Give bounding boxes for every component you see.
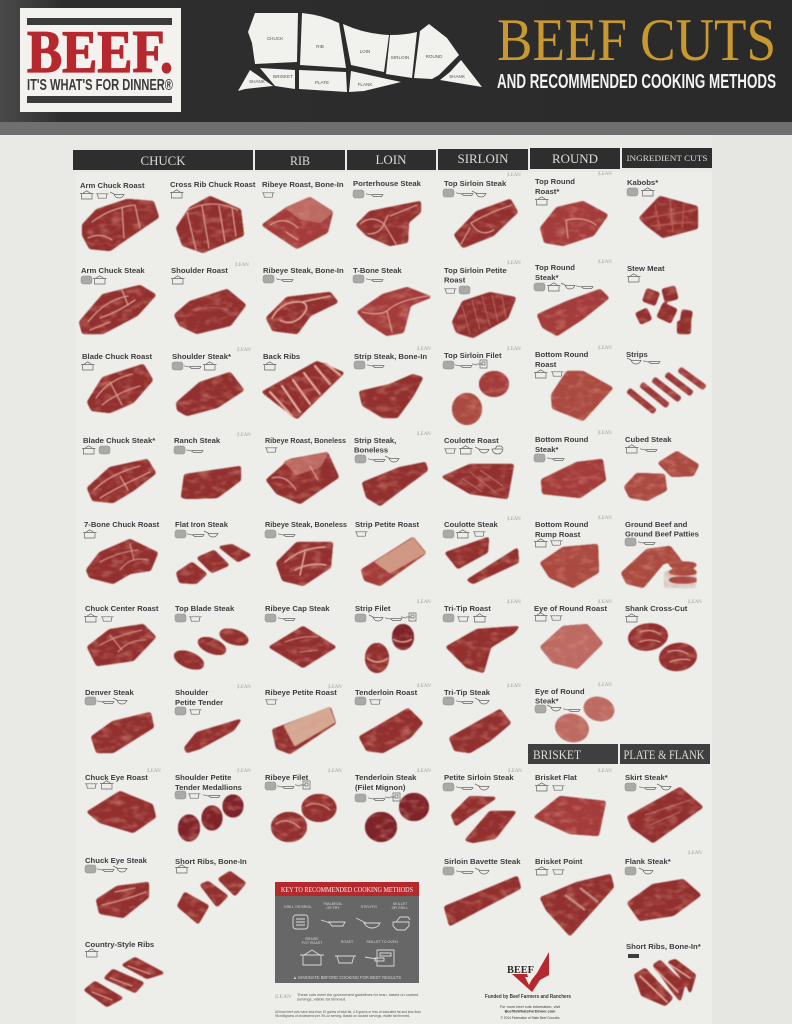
lean note: These cuts meet the government guidelines for lean, based on cooked bbox=[297, 992, 418, 997]
cut: Tenderloin Roast bbox=[355, 684, 431, 752]
cut: Chuck Eye Steak bbox=[85, 856, 148, 917]
cut: Shank Cross-Cut bbox=[625, 600, 702, 672]
cut: Short Ribs, Bone-In (plate): Short Ribs, Bone-In* bbox=[626, 942, 701, 951]
cut: Coulotte Steak bbox=[443, 517, 521, 583]
cut: Stew Meat bbox=[627, 264, 692, 333]
cut: Ground Beef and Ground Beef Patties: Ground Beef and bbox=[625, 520, 687, 529]
cut: Coulotte Roast bbox=[443, 436, 513, 498]
header band bbox=[0, 0, 792, 135]
marinate note: ▲ MARINATE BEFORE COOKING FOR BEST RESULTS bbox=[293, 975, 401, 980]
cut: Tenderloin Steak (Filet Mignon): Tenderloin Steak bbox=[355, 773, 416, 782]
cut: Top Sirloin Filet bbox=[443, 347, 521, 424]
column header: SIRLOIN: SIRLOIN bbox=[458, 152, 508, 166]
cut: Ribeye Steak, Boneless: Ribeye Steak, Boneless bbox=[265, 520, 347, 529]
cut: Strip Steak, Bone-In: Strip Steak, Bone-In bbox=[354, 352, 427, 361]
cut: Bottom Round Rump Roast bbox=[534, 516, 612, 587]
column header: BRISKET bbox=[528, 744, 618, 764]
key method labels: SKILLET TO OVEN bbox=[366, 940, 398, 944]
cut: Porterhouse Steak: Porterhouse Steak bbox=[353, 179, 422, 188]
cut: Bottom Round Rump Roast: Rump Roast bbox=[535, 530, 581, 539]
cut: Eye of Round Roast: |LEAN bbox=[598, 600, 612, 605]
cut: Ribeye Roast, Boneless: Ribeye Roast, Boneless bbox=[265, 436, 346, 445]
beef check logo: BEEF bbox=[507, 965, 534, 976]
cut: Strip Steak, Boneless: Strip Steak, bbox=[354, 436, 396, 445]
key method labels: STIR-FRY bbox=[361, 905, 378, 909]
cut: Chuck Eye Roast: Chuck Eye Roast bbox=[85, 773, 148, 782]
cut: Strip Steak, Bone-In: |LEAN bbox=[417, 347, 431, 352]
cut: Ribeye Roast, Boneless bbox=[265, 436, 346, 503]
cut: Bottom Round Steak: Steak* bbox=[535, 445, 559, 454]
cut: Eye of Round Roast: Eye of Round Roast bbox=[534, 604, 607, 613]
cut: Bottom Round Steak: Bottom Round bbox=[535, 435, 588, 444]
column header: BRISKET: BRISKET bbox=[533, 748, 581, 762]
cut: Bottom Round Roast bbox=[534, 346, 612, 420]
cut: Denver Steak: Denver Steak bbox=[85, 688, 134, 697]
cut: Back Ribs: Back Ribs bbox=[263, 352, 300, 361]
cut: Tenderloin Steak (Filet Mignon): (Filet Mignon) bbox=[355, 783, 406, 792]
key method labels: SKILLET bbox=[393, 902, 407, 906]
cut: Strip Steak, Boneless: Boneless bbox=[354, 446, 388, 454]
cut: T-Bone Steak bbox=[353, 266, 430, 335]
cut: Ribeye Cap Steak: Ribeye Cap Steak bbox=[265, 604, 330, 613]
cut: Ribeye Steak, Bone-In bbox=[263, 266, 344, 333]
cut: Brisket Point: Brisket Point bbox=[535, 857, 583, 866]
cut: Bottom Round Rump Roast: Bottom Round bbox=[535, 520, 588, 529]
cut: Ranch Steak bbox=[174, 433, 251, 498]
cut: Strip Petite Roast bbox=[355, 520, 425, 585]
column header: RIB bbox=[255, 150, 345, 170]
cut: Top Sirloin Petite Roast: Top Sirloin Petite bbox=[444, 266, 507, 275]
cut: Skirt Steak bbox=[625, 773, 702, 842]
cut: 7-Bone Chuck Roast bbox=[83, 520, 160, 583]
cut: Bottom Round Roast: |LEAN bbox=[598, 346, 612, 351]
cut: Chuck Center Roast bbox=[84, 604, 159, 665]
cut: Top Sirloin Steak bbox=[443, 173, 521, 247]
key heading: KEY TO RECOMMENDED COOKING METHODS bbox=[281, 885, 413, 894]
key method labels: OR FRY bbox=[326, 906, 340, 910]
cut: Ranch Steak: Ranch Steak bbox=[174, 436, 221, 445]
cut: Petite Sirloin Steak: |LEAN bbox=[508, 769, 522, 774]
lean note bbox=[275, 992, 418, 1002]
cut: Ribeye Cap Steak bbox=[265, 604, 335, 667]
cut: Flat Iron Steak: Flat Iron Steak bbox=[175, 520, 229, 529]
cut: Skirt Steak: Skirt Steak* bbox=[625, 773, 668, 782]
cut: Kabobs bbox=[627, 178, 697, 237]
cut: Shank Cross-Cut: Shank Cross-Cut bbox=[625, 604, 688, 613]
cut: Top Round Steak: Top Round bbox=[535, 263, 575, 272]
cut: Shoulder Petite Tender bbox=[175, 685, 251, 752]
cut: Bottom Round Roast: Roast bbox=[535, 360, 557, 369]
cut: Eye of Round Roast bbox=[534, 600, 612, 668]
beef cut diagram: BRISKET bbox=[273, 74, 293, 79]
cut: Brisket Flat: Brisket Flat bbox=[535, 773, 577, 782]
cut: Strip Filet: |LEAN bbox=[417, 600, 431, 605]
beef cut diagram: FLANK bbox=[358, 82, 373, 87]
cut: Blade Chuck Steak bbox=[82, 436, 155, 502]
cut: Ribeye Steak, Bone-In: Ribeye Steak, Bone-In bbox=[263, 266, 344, 275]
cut: Strip Filet bbox=[355, 600, 431, 672]
lean note: servings, visible fat trimmed. bbox=[297, 997, 346, 1002]
website note: BeefItsWhatsForDinner.com bbox=[505, 1010, 556, 1014]
column header: PLATE & FLANK: PLATE & FLANK bbox=[624, 748, 704, 762]
cut: Chuck Eye Steak: Chuck Eye Steak bbox=[85, 856, 148, 865]
cut: Chuck Center Roast: Chuck Center Roast bbox=[85, 604, 159, 613]
cut: Eye of Round Steak: |LEAN bbox=[598, 683, 612, 688]
cut: Coulotte Steak: Coulotte Steak bbox=[444, 520, 499, 529]
cut: Top Blade Steak: Top Blade Steak bbox=[175, 604, 235, 613]
cut: Top Round Roast bbox=[535, 172, 612, 245]
cut: Strips: Strips bbox=[626, 350, 648, 359]
cut: Porterhouse Steak bbox=[353, 179, 422, 245]
cut: Shoulder Steak: Shoulder Steak* bbox=[172, 352, 231, 361]
cut: Cross Rib Chuck Roast bbox=[170, 180, 256, 252]
cut: Shoulder Steak: |LEAN bbox=[237, 348, 251, 353]
cut: Ribeye Petite Roast: Ribeye Petite Roast bbox=[265, 688, 337, 697]
cut: Bottom Round Steak bbox=[534, 431, 612, 497]
column header: ROUND bbox=[530, 148, 620, 169]
cut: Shoulder Petite Tender: |LEAN bbox=[237, 685, 251, 690]
cut: Shoulder Petite Tender Medallions: Shoulder Petite bbox=[175, 773, 231, 782]
cut: Ribeye Petite Roast bbox=[265, 685, 342, 753]
column header: INGREDIENT CUTS: INGREDIENT CUTS bbox=[626, 153, 708, 163]
cut: Ribeye Petite Roast: |LEAN bbox=[328, 685, 342, 690]
cut: Top Sirloin Petite Roast: |LEAN bbox=[507, 261, 521, 266]
cut: T-Bone Steak: T-Bone Steak bbox=[353, 266, 402, 275]
column header: INGREDIENT CUTS bbox=[622, 148, 712, 168]
beef cut diagram: RIB bbox=[316, 44, 324, 49]
cut: Petite Sirloin Steak: Petite Sirloin Steak bbox=[444, 773, 514, 782]
cut: Eye of Round Steak: Eye of Round bbox=[535, 687, 585, 696]
key heading bbox=[275, 882, 419, 896]
cut: Top Sirloin Steak: Top Sirloin Steak bbox=[444, 179, 507, 188]
cut: Bottom Round Rump Roast: |LEAN bbox=[598, 516, 612, 521]
cut: Top Sirloin Petite Roast bbox=[444, 261, 521, 337]
cut: Ribeye Roast, Bone-In: Ribeye Roast, Bone-In bbox=[262, 180, 344, 189]
cut: Shoulder Petite Tender Medallions: |LEAN bbox=[237, 769, 251, 774]
cut: Tenderloin Roast: Tenderloin Roast bbox=[355, 688, 418, 697]
cut: Blade Chuck Roast: Blade Chuck Roast bbox=[82, 352, 152, 361]
cut: Tri-Tip Steak bbox=[443, 684, 521, 752]
cut: Arm Chuck Roast bbox=[80, 181, 158, 250]
lean footnote: 95 milligrams of cholesterol per 3½-oz serving. Based on cooked servings, visible fat trimmed. bbox=[275, 1014, 410, 1018]
beef cut diagram bbox=[238, 13, 482, 92]
cut: Cubed Steak: Cubed Steak bbox=[625, 435, 672, 444]
logo: Beef It's What's For Dinner bbox=[20, 8, 181, 112]
cut: Flank Steak: Flank Steak* bbox=[625, 857, 671, 866]
cut: Bottom Round Steak: |LEAN bbox=[598, 431, 612, 436]
lean footnote: All lean beef cuts have less than 10 grams of total fat, 4.5 grams or less of saturated fat and less than bbox=[275, 1010, 421, 1014]
cut: Sirloin Bavette Steak: Sirloin Bavette Steak bbox=[444, 857, 521, 866]
cut: Tri-Tip Roast bbox=[443, 600, 521, 672]
cut: Top Round Roast: Top Round bbox=[535, 177, 575, 186]
cut: Arm Chuck Steak: Arm Chuck Steak bbox=[81, 266, 145, 275]
cut: Top Round Roast: |LEAN bbox=[598, 172, 612, 177]
cut: Shoulder Steak bbox=[172, 348, 251, 415]
cut: Ribeye Filet bbox=[265, 769, 342, 841]
cut: Strip Steak, Boneless: |LEAN bbox=[417, 432, 431, 437]
cut: Eye of Round Steak bbox=[535, 683, 616, 745]
cut: Short Ribs, Bone-In (plate) bbox=[626, 942, 701, 1005]
beef cut diagram: LOIN bbox=[360, 49, 370, 54]
key icons bbox=[293, 915, 410, 966]
cut: Arm Chuck Steak bbox=[80, 266, 155, 333]
cut: Short Ribs, Bone-In: Short Ribs, Bone-In bbox=[175, 857, 247, 866]
cut: Tri-Tip Roast: |LEAN bbox=[507, 600, 521, 605]
cut: Top Sirloin Steak: |LEAN bbox=[507, 173, 521, 178]
cut: Strip Steak, Bone-In bbox=[354, 347, 431, 417]
cut: Strip Steak, Boneless bbox=[354, 432, 431, 505]
cut: Tri-Tip Steak: |LEAN bbox=[507, 684, 521, 689]
cut: Ground Beef and Ground Beef Patties bbox=[622, 520, 699, 587]
cut: Coulotte Steak: |LEAN bbox=[507, 517, 521, 522]
cut: Kabobs: Kabobs* bbox=[627, 178, 658, 187]
key method labels: PAN-BROIL bbox=[323, 902, 343, 906]
cut: Cross Rib Chuck Roast: Cross Rib Chuck Roast bbox=[170, 180, 256, 189]
beef cut diagram: PLATE bbox=[315, 80, 329, 85]
cut: Top Blade Steak bbox=[172, 604, 249, 672]
logo: Beef It's What's For Dinner: IT'S WHAT'S FOR DINNER® bbox=[27, 77, 173, 94]
cut: Arm Chuck Roast: Arm Chuck Roast bbox=[80, 181, 145, 190]
cut: Stew Meat: Stew Meat bbox=[627, 264, 665, 273]
cut: Brisket Point bbox=[535, 857, 613, 935]
cut: Ranch Steak: |LEAN bbox=[237, 433, 251, 438]
logo: Beef It's What's For Dinner: BEEF. bbox=[27, 19, 173, 85]
cut: Shoulder Petite Tender Medallions: Tender Medallions bbox=[175, 783, 242, 792]
column header: LOIN bbox=[347, 150, 436, 170]
cut: Ribeye Steak, Boneless bbox=[265, 520, 347, 585]
beef cut diagram: SIRLOIN bbox=[391, 55, 409, 60]
key method labels: POT ROAST bbox=[302, 941, 323, 945]
cut: Top Round Steak: Steak* bbox=[535, 273, 559, 282]
beef check logo bbox=[507, 952, 549, 992]
lean note: |LEAN bbox=[275, 994, 291, 1000]
panel: key to recommended cooking methods bbox=[275, 882, 419, 983]
column header: RIB: RIB bbox=[290, 154, 310, 168]
cut: Shank Cross-Cut: |LEAN bbox=[688, 600, 702, 605]
cut: Shoulder Roast bbox=[171, 263, 249, 333]
cut: Tenderloin Steak (Filet Mignon) bbox=[355, 769, 431, 841]
key method labels bbox=[284, 902, 408, 945]
column header: ROUND: ROUND bbox=[552, 152, 598, 166]
cut: Chuck Eye Roast: |LEAN bbox=[147, 769, 161, 774]
beef cut diagram: SHANK bbox=[449, 74, 466, 79]
website note: For more beef cuts information, visit bbox=[500, 1005, 561, 1009]
cut: Chuck Eye Roast bbox=[85, 769, 161, 832]
cut: Shoulder Roast: Shoulder Roast bbox=[171, 266, 228, 275]
cut: Flank Steak: |LEAN bbox=[688, 851, 702, 856]
cut: Top Sirloin Filet: |LEAN bbox=[507, 347, 521, 352]
cut: Strips bbox=[626, 350, 705, 412]
column header: CHUCK bbox=[73, 150, 253, 170]
cut: Petite Sirloin Steak bbox=[443, 769, 522, 842]
cut: Ground Beef and Ground Beef Patties: Ground Beef Patties bbox=[625, 530, 699, 538]
cut: Shoulder Roast: |LEAN bbox=[235, 263, 249, 268]
cut: Ribeye Filet: Ribeye Filet bbox=[265, 773, 309, 782]
funding line: Funded by Beef Farmers and Ranchers bbox=[485, 994, 571, 1000]
column header: LOIN: LOIN bbox=[376, 153, 406, 167]
cut: Blade Chuck Roast bbox=[81, 352, 152, 412]
cut: Ribeye Filet: |LEAN bbox=[328, 769, 342, 774]
cut: Denver Steak bbox=[85, 688, 153, 752]
beef cut diagram: CHUCK bbox=[267, 36, 284, 41]
cut: Tenderloin Roast: |LEAN bbox=[417, 684, 431, 689]
cut: Brisket Flat: |LEAN bbox=[598, 769, 612, 774]
cut: Country-Style Ribs: Country-Style Ribs bbox=[85, 940, 154, 949]
cut: Back Ribs bbox=[263, 352, 343, 418]
cut: Tenderloin Steak (Filet Mignon): |LEAN bbox=[417, 769, 431, 774]
cut: Eye of Round Steak: Steak* bbox=[535, 696, 559, 706]
cut: Shoulder Petite Tender Medallions bbox=[175, 769, 251, 840]
cut: Coulotte Roast: Coulotte Roast bbox=[444, 436, 499, 445]
cut: Top Round Steak bbox=[534, 260, 612, 335]
cut: Top Round Roast: Roast* bbox=[535, 187, 559, 196]
cut: Brisket Flat bbox=[535, 769, 612, 835]
cut: Top Round Steak: |LEAN bbox=[598, 260, 612, 265]
cut: Ribeye Roast, Bone-In bbox=[262, 180, 344, 248]
cut: Strip Filet: Strip Filet bbox=[355, 604, 391, 613]
key method labels: GRILL OR BROIL bbox=[284, 905, 312, 909]
key method labels: BRAISE bbox=[305, 937, 319, 941]
cut: Strip Petite Roast: Strip Petite Roast bbox=[355, 520, 420, 529]
cut: Top Sirloin Petite Roast: Roast bbox=[444, 276, 466, 284]
beef cut diagram: SHANK bbox=[249, 79, 266, 84]
column header: PLATE & FLANK bbox=[620, 744, 710, 764]
column header: SIRLOIN bbox=[438, 149, 528, 170]
key method labels: OR GRILL bbox=[392, 906, 408, 910]
cut: Cubed Steak bbox=[625, 435, 698, 500]
cut: Short Ribs, Bone-In bbox=[175, 857, 247, 923]
key method labels: ROAST bbox=[341, 940, 354, 944]
cut: 7-Bone Chuck Roast: 7-Bone Chuck Roast bbox=[84, 520, 160, 529]
cut: Bottom Round Roast: Bottom Round bbox=[535, 350, 588, 359]
cut: Tri-Tip Steak: Tri-Tip Steak bbox=[444, 688, 491, 697]
cut: Sirloin Bavette Steak bbox=[443, 857, 521, 925]
cut: Flank Steak bbox=[625, 851, 702, 920]
cut: Country-Style Ribs bbox=[85, 940, 163, 1006]
cut: Top Sirloin Filet: Top Sirloin Filet bbox=[444, 351, 502, 360]
cut: Blade Chuck Steak: Blade Chuck Steak* bbox=[83, 436, 155, 445]
cut: Shoulder Petite Tender: Shoulder bbox=[175, 688, 208, 697]
cut: Tri-Tip Roast: Tri-Tip Roast bbox=[444, 604, 491, 613]
column header: CHUCK: CHUCK bbox=[140, 154, 186, 168]
cut: Shoulder Petite Tender: Petite Tender bbox=[175, 698, 223, 707]
cut: Flat Iron Steak bbox=[175, 520, 250, 583]
website note: © 2014 Federation of State Beef Councils bbox=[501, 1016, 560, 1020]
beef cut diagram: ROUND bbox=[426, 54, 443, 59]
website note bbox=[500, 1005, 561, 1020]
